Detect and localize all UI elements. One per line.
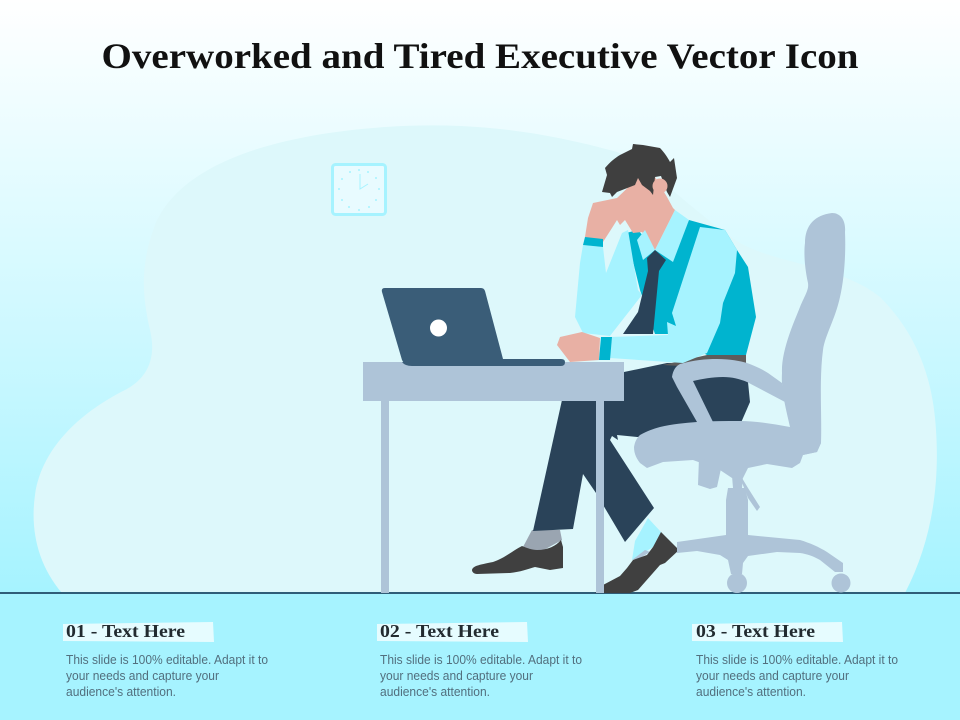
base — [677, 535, 843, 574]
face and raised forearm — [585, 177, 675, 250]
heading: 03 - Text Here — [696, 621, 815, 641]
lever — [741, 478, 760, 511]
floor line — [0, 592, 960, 594]
floor — [0, 592, 960, 720]
right foot sock — [632, 518, 661, 560]
centre caster — [727, 573, 747, 593]
left collar — [637, 230, 655, 260]
label highlight — [377, 622, 528, 642]
right cuff — [599, 337, 612, 360]
body text: your needs and capture your — [696, 668, 850, 683]
tie — [623, 250, 666, 334]
background blob — [34, 125, 937, 593]
office chair — [634, 213, 850, 593]
heading: 02 - Text Here — [380, 621, 499, 641]
vest — [626, 220, 756, 355]
body text: This slide is 100% editable. Adapt it to — [696, 652, 898, 667]
right caster — [832, 574, 850, 592]
label highlight — [63, 622, 214, 642]
title: Overworked and Tired Executive Vector Icon — [102, 36, 858, 76]
body text: This slide is 100% editable. Adapt it to — [66, 652, 268, 667]
icon: wall clock — [332, 164, 386, 214]
body text: This slide is 100% editable. Adapt it to — [380, 652, 582, 667]
gas column — [726, 476, 748, 536]
right collar — [655, 210, 689, 262]
right shoe — [595, 532, 679, 593]
seat handle — [698, 458, 722, 489]
right foot sock shade — [632, 550, 650, 560]
heading: 01 - Text Here — [66, 621, 185, 641]
resting hand — [557, 332, 600, 362]
label highlight — [692, 622, 843, 642]
column 3 — [692, 621, 898, 699]
person — [472, 144, 756, 593]
hair — [602, 144, 677, 197]
laptop — [382, 288, 565, 366]
column 2 — [377, 621, 582, 699]
left sleeve — [575, 230, 642, 336]
left cuff — [583, 237, 603, 247]
right sleeve — [610, 227, 737, 363]
chair back — [782, 213, 845, 455]
column 1 — [63, 621, 268, 699]
body text: your needs and capture your — [66, 668, 220, 683]
armrest — [672, 359, 785, 422]
desk — [363, 362, 624, 593]
seat — [634, 421, 821, 478]
laptop base overlap — [402, 362, 565, 366]
body text: audience's attention. — [66, 684, 176, 699]
body text: your needs and capture your — [380, 668, 534, 683]
body text: audience's attention. — [380, 684, 490, 699]
belt — [663, 355, 746, 366]
shirt gap stripe — [610, 295, 646, 336]
body text: audience's attention. — [696, 684, 806, 699]
ear — [652, 178, 668, 194]
left sock — [523, 530, 562, 552]
left shoe — [472, 540, 563, 574]
trousers — [533, 362, 750, 542]
